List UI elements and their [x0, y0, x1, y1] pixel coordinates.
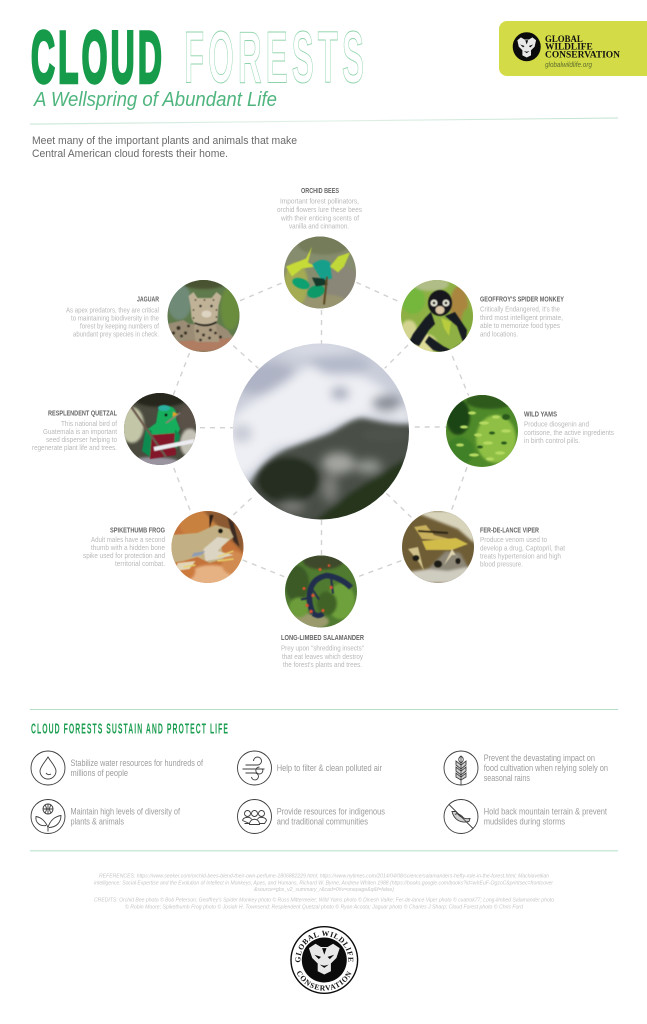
label: resplendent quetzal: This national bird of [61, 421, 117, 428]
icon: people [238, 800, 272, 834]
label: orchid bees: vanilla and cinnamon. [289, 224, 349, 230]
logo badge: globalwildlife.org [545, 62, 592, 69]
benefit: mudslides [444, 800, 607, 834]
label: orchid bees: Important forest pollinators, [280, 198, 359, 206]
label: spikethumb frog: territorial combat. [115, 561, 165, 568]
label: geoffroy's spider monkey [480, 296, 564, 338]
intro text: Central American cloud forests their home. [32, 148, 228, 160]
logo badge [499, 21, 647, 76]
label: geoffroy's spider monkey: and locations. [480, 332, 518, 338]
references: intelligence: Social Expertise and the Evolution of Intellect in Monkeys, Apes, and Humans, Richard W. Byrne, Andrew Whiten 1988 (https://books.google.com/books?id=wIrEuF-OgzoC&printsec=frontcover [94, 880, 553, 886]
photo: wild yams [446, 393, 518, 467]
photo: resplendent quetzal [124, 393, 196, 465]
photo: orchid bees [284, 236, 356, 308]
icon: tiger head logo [513, 32, 541, 61]
benefit: communities: Provide resources for indigenous [277, 807, 386, 817]
photo: cloud forest [233, 344, 409, 520]
label: fer-de-lance viper: treats hypertension and high [480, 554, 561, 560]
label: wild yams: WILD YAMS [524, 412, 557, 418]
benefit: air [238, 751, 382, 785]
photo: spikethumb frog [172, 511, 244, 583]
label: spikethumb frog: thumb with a hidden bone [91, 545, 165, 552]
benefit: water: millions of people [70, 768, 128, 778]
icon: water drop [31, 751, 65, 785]
icon: crossed-out mudslide [444, 800, 478, 834]
benefit: food [444, 751, 608, 785]
footer logo: GLOBAL WILDLIFE [295, 930, 354, 962]
label: fer-de-lance viper [480, 528, 565, 568]
benefit: mudslides: mudslides during storms [484, 817, 566, 827]
label: wild yams: cortisone, the active ingredients [524, 430, 614, 437]
label: jaguar [66, 297, 159, 338]
label: long-limbed salamander: that eat leaves which destroy [282, 654, 363, 661]
label: orchid bees: with their enticing scents of [280, 215, 359, 222]
references: REFERENCES: https://www.seeker.com/orchid-bees-blend-their-own-perfume-1806882229.html; https://www.nytimes.com/2014/04/08/science/salamanders-hefty-role-in-the-forest.html; Machiavellian [99, 874, 549, 880]
photo: fer-de-lance viper [402, 511, 474, 583]
intro text [32, 135, 297, 160]
text: FORESTS [184, 18, 368, 98]
label: fer-de-lance viper: blood pressure. [480, 562, 523, 568]
label: geoffroy's spider monkey: Critically Endangered, it's the [480, 306, 560, 314]
credits: CREDITS: Orchid Bee photo © Bob Peterson; Geoffrey's Spider Monkey photo © Russ Mittermeier; Wild Yams photo © Dinesh Valke; Fer-de-lance Viper photo © cuatrok77; Long-limbed Salamander photo [94, 896, 554, 904]
references: &source=gbs_v2_summary_r&cad=0#v=onepage&q&f=false) [254, 887, 394, 893]
benefit: mudslides: Hold back mountain terrain & prevent [484, 807, 607, 817]
label: jaguar: abundant prey species in check. [73, 331, 159, 338]
icon: tiger head [309, 944, 340, 974]
label: geoffroy's spider monkey: third most intelligent primate, [480, 315, 563, 322]
references [94, 874, 553, 893]
label: jaguar: As apex predators, they are critical [66, 308, 159, 314]
label: spikethumb frog: Adult males have a second [91, 537, 165, 544]
logo badge: GLOBAL [545, 34, 583, 44]
footer logo [290, 926, 358, 994]
label: geoffroy's spider monkey: able to memorize food types [480, 323, 560, 330]
label: orchid bees: orchid flowers lure these bees [277, 207, 362, 214]
subtitle: A Wellspring of Abundant Life [33, 89, 277, 111]
label: spikethumb frog: spike used for protection and [83, 553, 165, 560]
label: orchid bees [277, 188, 362, 230]
label: jaguar: to maintaining biodiversity in the [71, 316, 159, 322]
label: orchid bees: ORCHID BEES [301, 188, 339, 195]
label: spikethumb frog [83, 528, 165, 568]
benefit: communities: and traditional communities [277, 817, 369, 827]
label: resplendent quetzal: regenerate plant life and trees. [32, 445, 117, 452]
icon: wheat [444, 751, 478, 785]
logo badge: CONSERVATION [545, 49, 620, 59]
label: resplendent quetzal: RESPLENDENT QUETZAL [48, 410, 118, 418]
icon: globe and leaves [31, 800, 65, 834]
label: long-limbed salamander: LONG-LIMBED SALAMANDER [281, 635, 364, 642]
title: CLOUD [31, 18, 165, 98]
label: long-limbed salamander: the forest's plants and trees. [283, 662, 362, 669]
label: fer-de-lance viper: Produce venom used to [480, 537, 547, 544]
text: CLOUD FORESTS SUSTAIN AND PROTECT LIFE [31, 722, 229, 738]
label: long-limbed salamander [281, 635, 364, 669]
benefit: air: Help to filter & clean polluted air [277, 763, 382, 773]
intro text: Meet many of the important plants and animals that make [32, 135, 297, 147]
photo: long-limbed salamander [285, 554, 357, 630]
benefit: food: Prevent the devastating impact on [484, 753, 595, 763]
footer logo: CONSERVATION [297, 970, 352, 991]
label: resplendent quetzal: seed disperser helping to [46, 437, 117, 444]
benefit: biodiversity [31, 800, 180, 834]
label: jaguar: JAGUAR [137, 297, 159, 304]
label: resplendent quetzal [32, 410, 118, 452]
label: fer-de-lance viper: develop a drug, Captopril, that [480, 546, 565, 552]
credits [94, 896, 554, 910]
label: wild yams [524, 412, 614, 445]
label: resplendent quetzal: Guatemala is an important [43, 429, 117, 436]
label: wild yams: Produce diosgenin and [524, 422, 589, 428]
photo: spider monkey [401, 277, 475, 354]
label: geoffroy's spider monkey: GEOFFROY'S SPIDER MONKEY [480, 296, 564, 304]
connector lines [173, 282, 469, 577]
credits: © Robin Moore; Spikethumb Frog photo © Josiah H. Townsend; Resplendent Quetzal photo © Ryan Acosta; Jaguar photo © Charles J Sharp; Cloud Forest photo © Chris Ford [125, 904, 523, 910]
benefit: biodiversity: plants & animals [70, 817, 124, 827]
label: long-limbed salamander: Prey upon "shredding insects" [281, 646, 364, 652]
benefit: water [31, 751, 203, 785]
photo: jaguar [168, 275, 240, 352]
benefit: communities [238, 800, 386, 834]
label: jaguar: forest by keeping numbers of [80, 323, 159, 330]
label: wild yams: in birth control pills. [524, 438, 580, 445]
benefit: food: seasonal rains [484, 773, 530, 783]
label: spikethumb frog: SPIKETHUMB FROG [110, 528, 165, 534]
logo badge: WILDLIFE [545, 42, 593, 52]
benefit: water: Stabilize water resources for hundreds of [70, 758, 203, 768]
benefit: biodiversity: Maintain high levels of diversity of [70, 807, 180, 817]
label: fer-de-lance viper: FER-DE-LANCE VIPER [480, 528, 539, 534]
icon: wind [238, 751, 272, 785]
benefit: food: food cultivation when relying solely on [484, 763, 608, 773]
